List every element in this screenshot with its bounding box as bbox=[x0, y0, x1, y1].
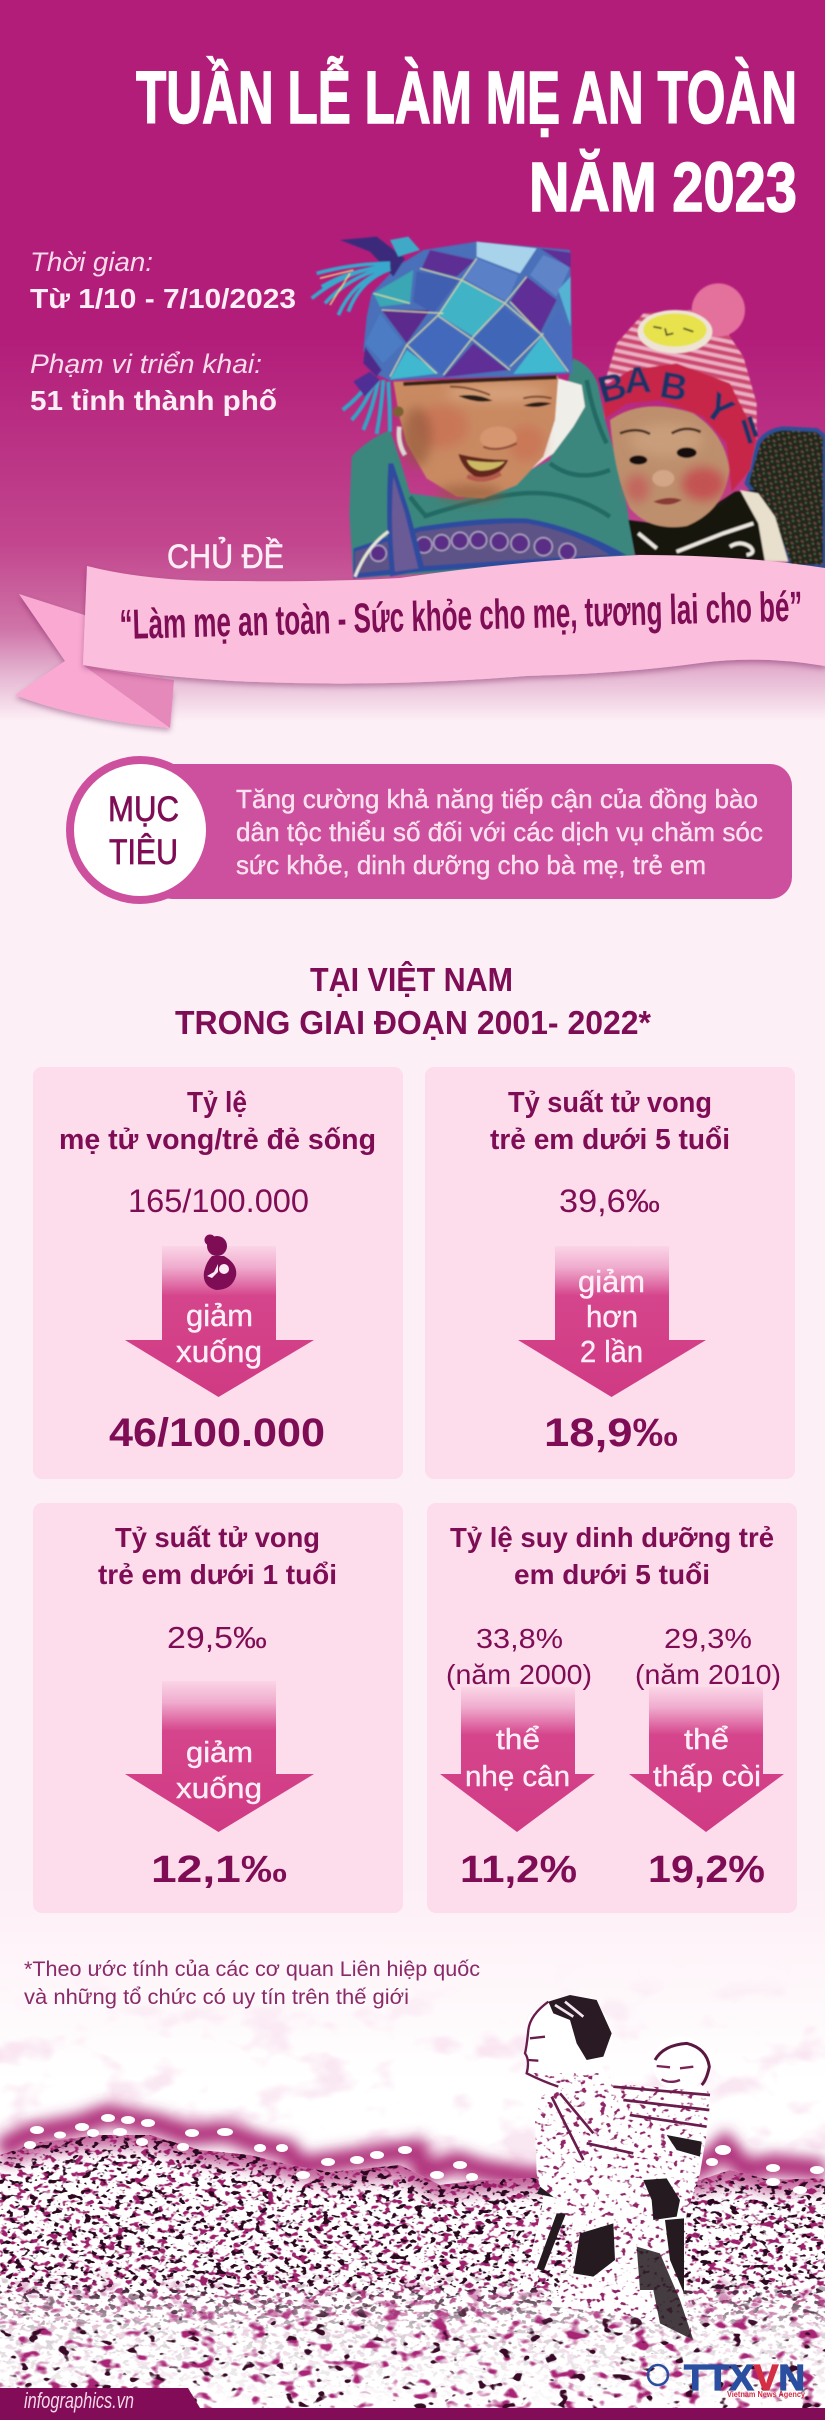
arrow label bbox=[176, 1298, 262, 1369]
field illustration bbox=[0, 2114, 825, 2420]
face outline bbox=[525, 2002, 558, 2087]
tassels bbox=[340, 237, 405, 277]
event details: Thời gian: bbox=[30, 247, 153, 277]
start values: underweight: 33,8% bbox=[476, 1623, 563, 1654]
start values: underweight bbox=[446, 1623, 592, 1690]
icon: nursing mother bbox=[204, 1234, 236, 1290]
source: infographics.vn bbox=[24, 2388, 134, 2413]
arrow label: stunting: thấp còi bbox=[653, 1761, 761, 1793]
panel heading bbox=[450, 1522, 774, 1590]
panel: child malnutrition bbox=[427, 1503, 797, 1913]
baby clothes bbox=[628, 490, 788, 562]
arrow: underweight bbox=[440, 1687, 595, 1832]
ribbon banner bbox=[83, 555, 825, 684]
embroidered sash bbox=[353, 518, 627, 578]
photo: mother and baby: BABY bbox=[594, 358, 742, 433]
start values: stunting: (năm 2010) bbox=[635, 1659, 781, 1690]
dark clothing bbox=[537, 2135, 702, 2340]
event details: Từ 1/10 - 7/10/2023 bbox=[30, 283, 296, 314]
objective panel bbox=[70, 760, 792, 900]
result value: 18,9‰ bbox=[544, 1411, 678, 1455]
footnote: và những tổ chức có uy tín trên thế giới bbox=[24, 1986, 409, 2009]
panel heading: Tỷ suất tử vong bbox=[115, 1522, 320, 1553]
section heading: TẠI VIỆT NAM bbox=[310, 961, 513, 998]
arrow label: 2 lần bbox=[580, 1334, 643, 1369]
hair bbox=[548, 1995, 612, 2060]
objective bar bbox=[150, 764, 792, 899]
baby wrap stripes bbox=[552, 2087, 710, 2160]
arrow label bbox=[176, 1737, 262, 1805]
footnote: *Theo ước tính của các cơ quan Liên hiệp quốc bbox=[24, 1958, 480, 1981]
event details: Phạm vi triển khai: bbox=[30, 349, 262, 379]
fleece collar bbox=[495, 378, 585, 490]
mother jacket bbox=[349, 358, 635, 578]
arrow label: xuống bbox=[176, 1773, 262, 1805]
result value: 12,1‰ bbox=[151, 1849, 287, 1891]
photo: mother and baby bbox=[312, 237, 825, 578]
arrow label: giảm bbox=[578, 1264, 645, 1299]
start values: stunting: 29,3% bbox=[664, 1623, 752, 1654]
theme label: CHỦ ĐỀ bbox=[167, 538, 284, 576]
arrow label: giảm bbox=[186, 1298, 253, 1333]
arrow bbox=[125, 1246, 314, 1397]
figure texture bbox=[513, 2073, 713, 2340]
ribbon tail bbox=[15, 594, 173, 728]
panel heading: trẻ em dưới 5 tuổi bbox=[490, 1124, 730, 1156]
title bbox=[136, 56, 797, 226]
objective badge bbox=[70, 760, 210, 900]
headscarf bbox=[363, 242, 573, 381]
result value: stunting: 19,2% bbox=[648, 1849, 765, 1891]
child head bbox=[653, 2036, 709, 2091]
faint sky texture bbox=[0, 1996, 825, 2180]
objective text: Tăng cường khả năng tiếp cận của đồng bào bbox=[236, 784, 758, 814]
logo: TTXVN: Vietnam News Agency bbox=[727, 2390, 806, 2399]
panel heading bbox=[59, 1087, 376, 1156]
panel heading bbox=[490, 1087, 730, 1156]
footnote bbox=[24, 1958, 480, 2009]
baby knit hat bbox=[603, 310, 757, 440]
panel heading: Tỷ lệ bbox=[187, 1087, 247, 1119]
section heading bbox=[175, 961, 651, 1041]
arrow label: stunting bbox=[653, 1724, 761, 1793]
result value: 46/100.000 bbox=[109, 1411, 325, 1455]
panel heading: trẻ em dưới 1 tuổi bbox=[98, 1559, 337, 1590]
objective label: MỤC bbox=[108, 790, 179, 829]
objective label bbox=[108, 790, 179, 872]
start value: 165/100.000 bbox=[128, 1183, 309, 1219]
panel: under-5 mortality bbox=[425, 1067, 795, 1479]
start value: 29,5‰ bbox=[167, 1620, 267, 1655]
start value: 39,6‰ bbox=[559, 1183, 660, 1219]
arrow label: underweight: thể bbox=[496, 1724, 540, 1756]
baby carrier mesh bbox=[747, 428, 825, 567]
panel: under-1 mortality bbox=[33, 1503, 403, 1913]
event details bbox=[30, 247, 296, 416]
panel: maternal mortality bbox=[33, 1067, 403, 1479]
panel heading: Tỷ lệ suy dinh dưỡng trẻ bbox=[450, 1522, 774, 1553]
illustration: mother carrying child bbox=[513, 1995, 713, 2340]
panel heading: mẹ tử vong/trẻ đẻ sống bbox=[59, 1124, 376, 1156]
bottom band bbox=[0, 2388, 825, 2420]
result value: underweight: 11,2% bbox=[460, 1849, 577, 1891]
arrow bbox=[125, 1681, 314, 1832]
figure body bbox=[517, 1995, 710, 2340]
ribbon fold bbox=[83, 665, 174, 728]
section heading: TRONG GIAI ĐOẠN 2001- 2022* bbox=[175, 1004, 651, 1041]
arrow bbox=[518, 1246, 706, 1397]
copyright mark bbox=[648, 2365, 668, 2385]
event details: 51 tỉnh thành phố bbox=[30, 385, 277, 416]
objective label: TIÊU bbox=[109, 833, 178, 872]
arrow label: underweight bbox=[465, 1724, 570, 1793]
arrow: stunting bbox=[629, 1687, 784, 1832]
objective text: sức khỏe, dinh dưỡng cho bà mẹ, trẻ em bbox=[236, 850, 706, 880]
arrow label: underweight: nhẹ cân bbox=[465, 1761, 570, 1793]
objective text bbox=[236, 784, 763, 880]
start values: stunting bbox=[635, 1623, 781, 1690]
arrow label: xuống bbox=[176, 1334, 262, 1369]
arrow label bbox=[578, 1264, 645, 1369]
mother face bbox=[393, 376, 558, 498]
arrow label: stunting: thể bbox=[684, 1724, 729, 1756]
objective text: dân tộc thiểu số đối với các dịch vụ chăm sóc bbox=[236, 817, 763, 847]
panel heading: Tỷ suất tử vong bbox=[508, 1087, 712, 1119]
baby face bbox=[610, 406, 729, 527]
arrow label: hơn bbox=[586, 1299, 638, 1334]
arrow label: giảm bbox=[186, 1737, 253, 1769]
start values: underweight: (năm 2000) bbox=[446, 1659, 592, 1690]
panel heading bbox=[98, 1522, 337, 1590]
flower blobs bbox=[24, 2114, 824, 2194]
logo: TTXVN: TTXVN bbox=[684, 2357, 805, 2398]
panel heading: em dưới 5 tuổi bbox=[514, 1559, 710, 1590]
